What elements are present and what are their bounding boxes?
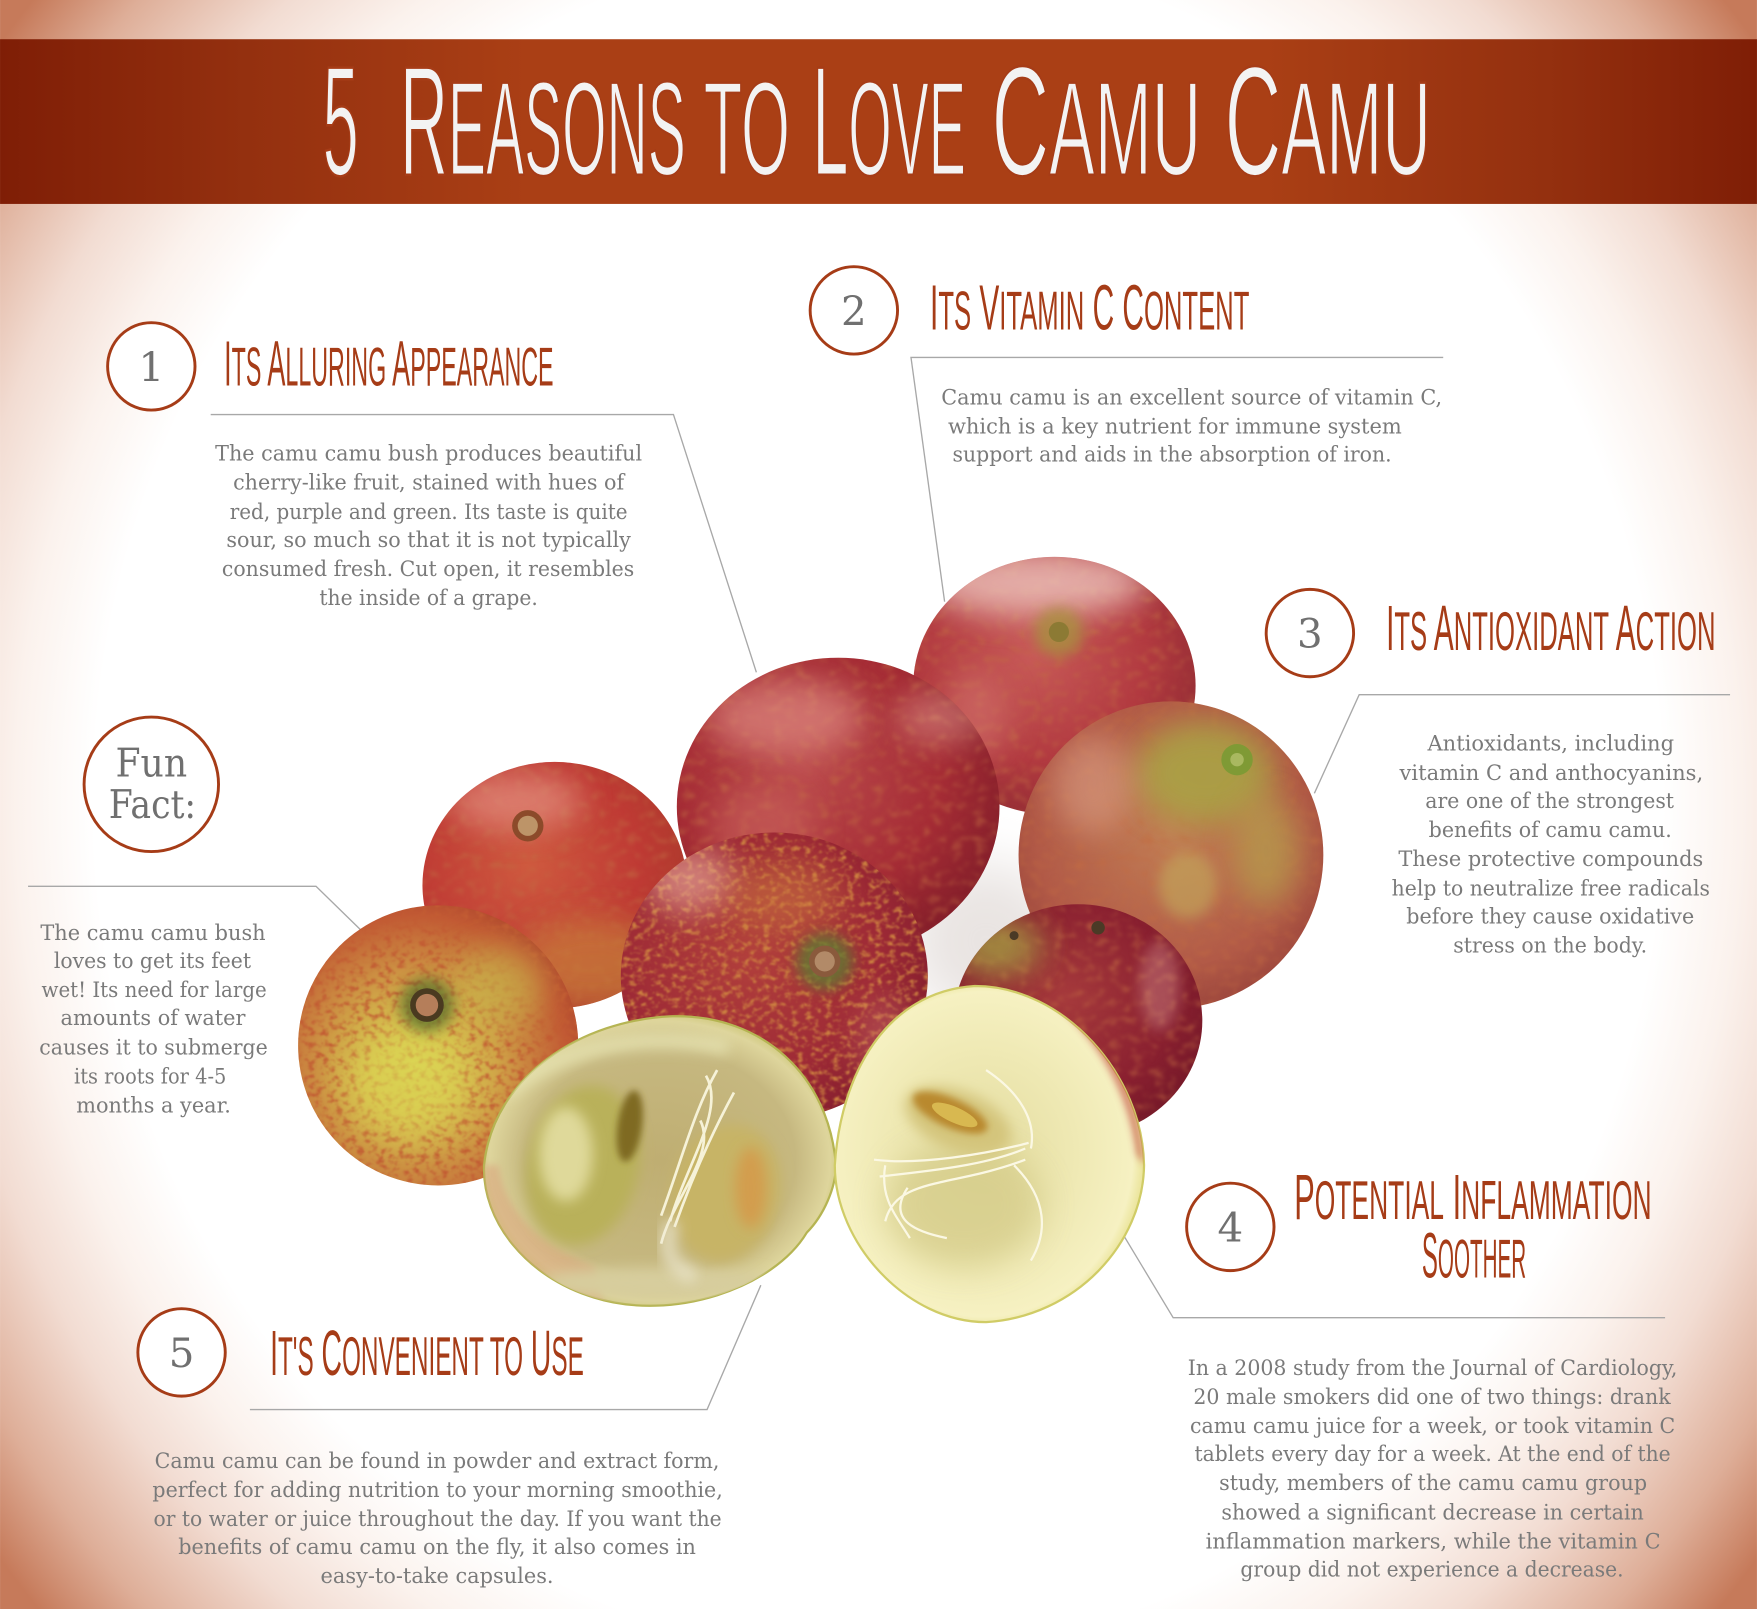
body 1 bbox=[215, 442, 642, 611]
badge 3 bbox=[1266, 589, 1354, 677]
body 1: cherry-like fruit, stained with hues of bbox=[233, 471, 626, 496]
body 3: stress on the body. bbox=[1453, 933, 1647, 958]
body 4: 20 male smokers did one of two things: drank bbox=[1193, 1385, 1672, 1410]
title bbox=[323, 35, 1431, 209]
body 3: These protective compounds bbox=[1398, 847, 1703, 872]
fruit: right mottled bbox=[1019, 701, 1323, 1008]
section 4: potential inflammation soother bbox=[1187, 1161, 1677, 1583]
body 3: benefits of camu camu. bbox=[1429, 818, 1672, 843]
body 4: In a 2008 study from the Journal of Cardiology, bbox=[1188, 1356, 1677, 1381]
body: fun fact: months a year. bbox=[76, 1094, 231, 1119]
body: fun fact bbox=[39, 921, 268, 1119]
body: fun fact: The camu camu bush bbox=[40, 921, 266, 946]
heading 1: ITS ALLURING APPEARANCE bbox=[224, 327, 554, 399]
body 1: the inside of a grape. bbox=[319, 586, 538, 611]
badge: fun fact: Fact: bbox=[109, 783, 196, 828]
fruit: cut half left bbox=[484, 1016, 836, 1306]
badge: fun fact: Fun bbox=[115, 741, 187, 786]
fruit: far left bbox=[298, 905, 578, 1185]
body 4: study, members of the camu camu group bbox=[1219, 1471, 1647, 1496]
body 5: or to water or juice throughout the day. If you want the bbox=[154, 1507, 722, 1532]
body: fun fact: amounts of water bbox=[61, 1006, 246, 1031]
body 4: showed a significant decrease in certain bbox=[1221, 1500, 1644, 1525]
illustration: camu camu fruits bbox=[298, 549, 1323, 1322]
body: fun fact: wet! Its need for large bbox=[42, 978, 267, 1003]
badge 2: 2 bbox=[841, 288, 867, 335]
badge 5 bbox=[138, 1309, 225, 1396]
heading 5: IT'S CONVENIENT TO USE bbox=[270, 1317, 584, 1389]
body: fun fact: causes it to submerge bbox=[39, 1035, 268, 1060]
badge 4: 4 bbox=[1217, 1204, 1243, 1251]
badge 5: 5 bbox=[169, 1330, 194, 1377]
section 5: it's convenient to use bbox=[138, 1309, 723, 1589]
body 2 bbox=[941, 385, 1442, 468]
body 1: The camu camu bush produces beautiful bbox=[215, 442, 642, 467]
body 5 bbox=[152, 1449, 723, 1589]
callout lines bbox=[28, 357, 1730, 1410]
badge 1: 1 bbox=[138, 344, 164, 391]
heading 4 bbox=[1294, 1161, 1652, 1291]
section 1: its alluring appearance bbox=[108, 323, 642, 611]
title: CAMU bbox=[1225, 35, 1431, 209]
body 5: benefits of camu camu on the fly, it also comes in bbox=[178, 1535, 696, 1560]
heading 2: ITS VITAMIN C CONTENT bbox=[930, 271, 1249, 343]
body 4: camu camu juice for a week, or took vitamin C bbox=[1190, 1414, 1675, 1439]
title: REASONS bbox=[400, 35, 686, 209]
fruit: front centre bbox=[621, 833, 928, 1119]
section 2: its vitamin c content bbox=[810, 267, 1442, 468]
section 3: its antioxidant action bbox=[1266, 589, 1715, 958]
body 1: consumed fresh. Cut open, it resembles bbox=[222, 557, 634, 582]
heading 4: SOOTHER bbox=[1422, 1219, 1526, 1291]
badge 1 bbox=[108, 323, 195, 410]
body 3: help to neutralize free radicals bbox=[1392, 876, 1710, 901]
body 1: red, purple and green. Its taste is quite bbox=[230, 500, 628, 525]
body 5: Camu camu can be found in powder and extract form, bbox=[155, 1449, 719, 1474]
body 4: inflammation markers, while the vitamin C bbox=[1206, 1529, 1661, 1554]
body: fun fact: its roots for 4-5 bbox=[74, 1064, 226, 1089]
body 3 bbox=[1392, 732, 1710, 958]
body 5: perfect for adding nutrition to your morning smoothie, bbox=[152, 1478, 723, 1503]
body 4 bbox=[1188, 1356, 1677, 1583]
body 2: support and aids in the absorption of iron. bbox=[952, 443, 1392, 468]
body 3: before they cause oxidative bbox=[1406, 904, 1694, 929]
fruit: right lower dark bbox=[952, 904, 1202, 1137]
fruit: left back bbox=[422, 762, 687, 1008]
body 2: which is a key nutrient for immune system bbox=[948, 415, 1402, 440]
body 4: tablets every day for a week. At the end of the bbox=[1194, 1442, 1671, 1467]
body 3: vitamin C and anthocyanins, bbox=[1399, 761, 1703, 786]
title banner bbox=[0, 35, 1757, 209]
body 2: Camu camu is an excellent source of vitamin C, bbox=[941, 385, 1442, 410]
title: TO bbox=[704, 55, 790, 204]
body 3: Antioxidants, including bbox=[1427, 732, 1674, 757]
badge 3: 3 bbox=[1297, 611, 1323, 658]
body 4: group did not experience a decrease. bbox=[1240, 1558, 1624, 1583]
badge 4 bbox=[1187, 1183, 1274, 1271]
body 5: easy-to-take capsules. bbox=[321, 1564, 554, 1589]
fruit: cut half right bbox=[835, 986, 1144, 1322]
title: CAMU bbox=[992, 35, 1201, 209]
body 3: are one of the strongest bbox=[1425, 789, 1674, 814]
title: LOVE bbox=[812, 35, 966, 209]
badge: fun fact bbox=[84, 717, 219, 852]
fruit: large back bbox=[677, 658, 1000, 956]
badge 2 bbox=[810, 267, 898, 354]
body 1: sour, so much so that it is not typically bbox=[226, 528, 631, 553]
fruit: back top bbox=[913, 549, 1196, 815]
body: fun fact: loves to get its feet bbox=[54, 949, 251, 974]
title: 5 bbox=[323, 35, 359, 209]
section: fun fact bbox=[39, 717, 268, 1119]
